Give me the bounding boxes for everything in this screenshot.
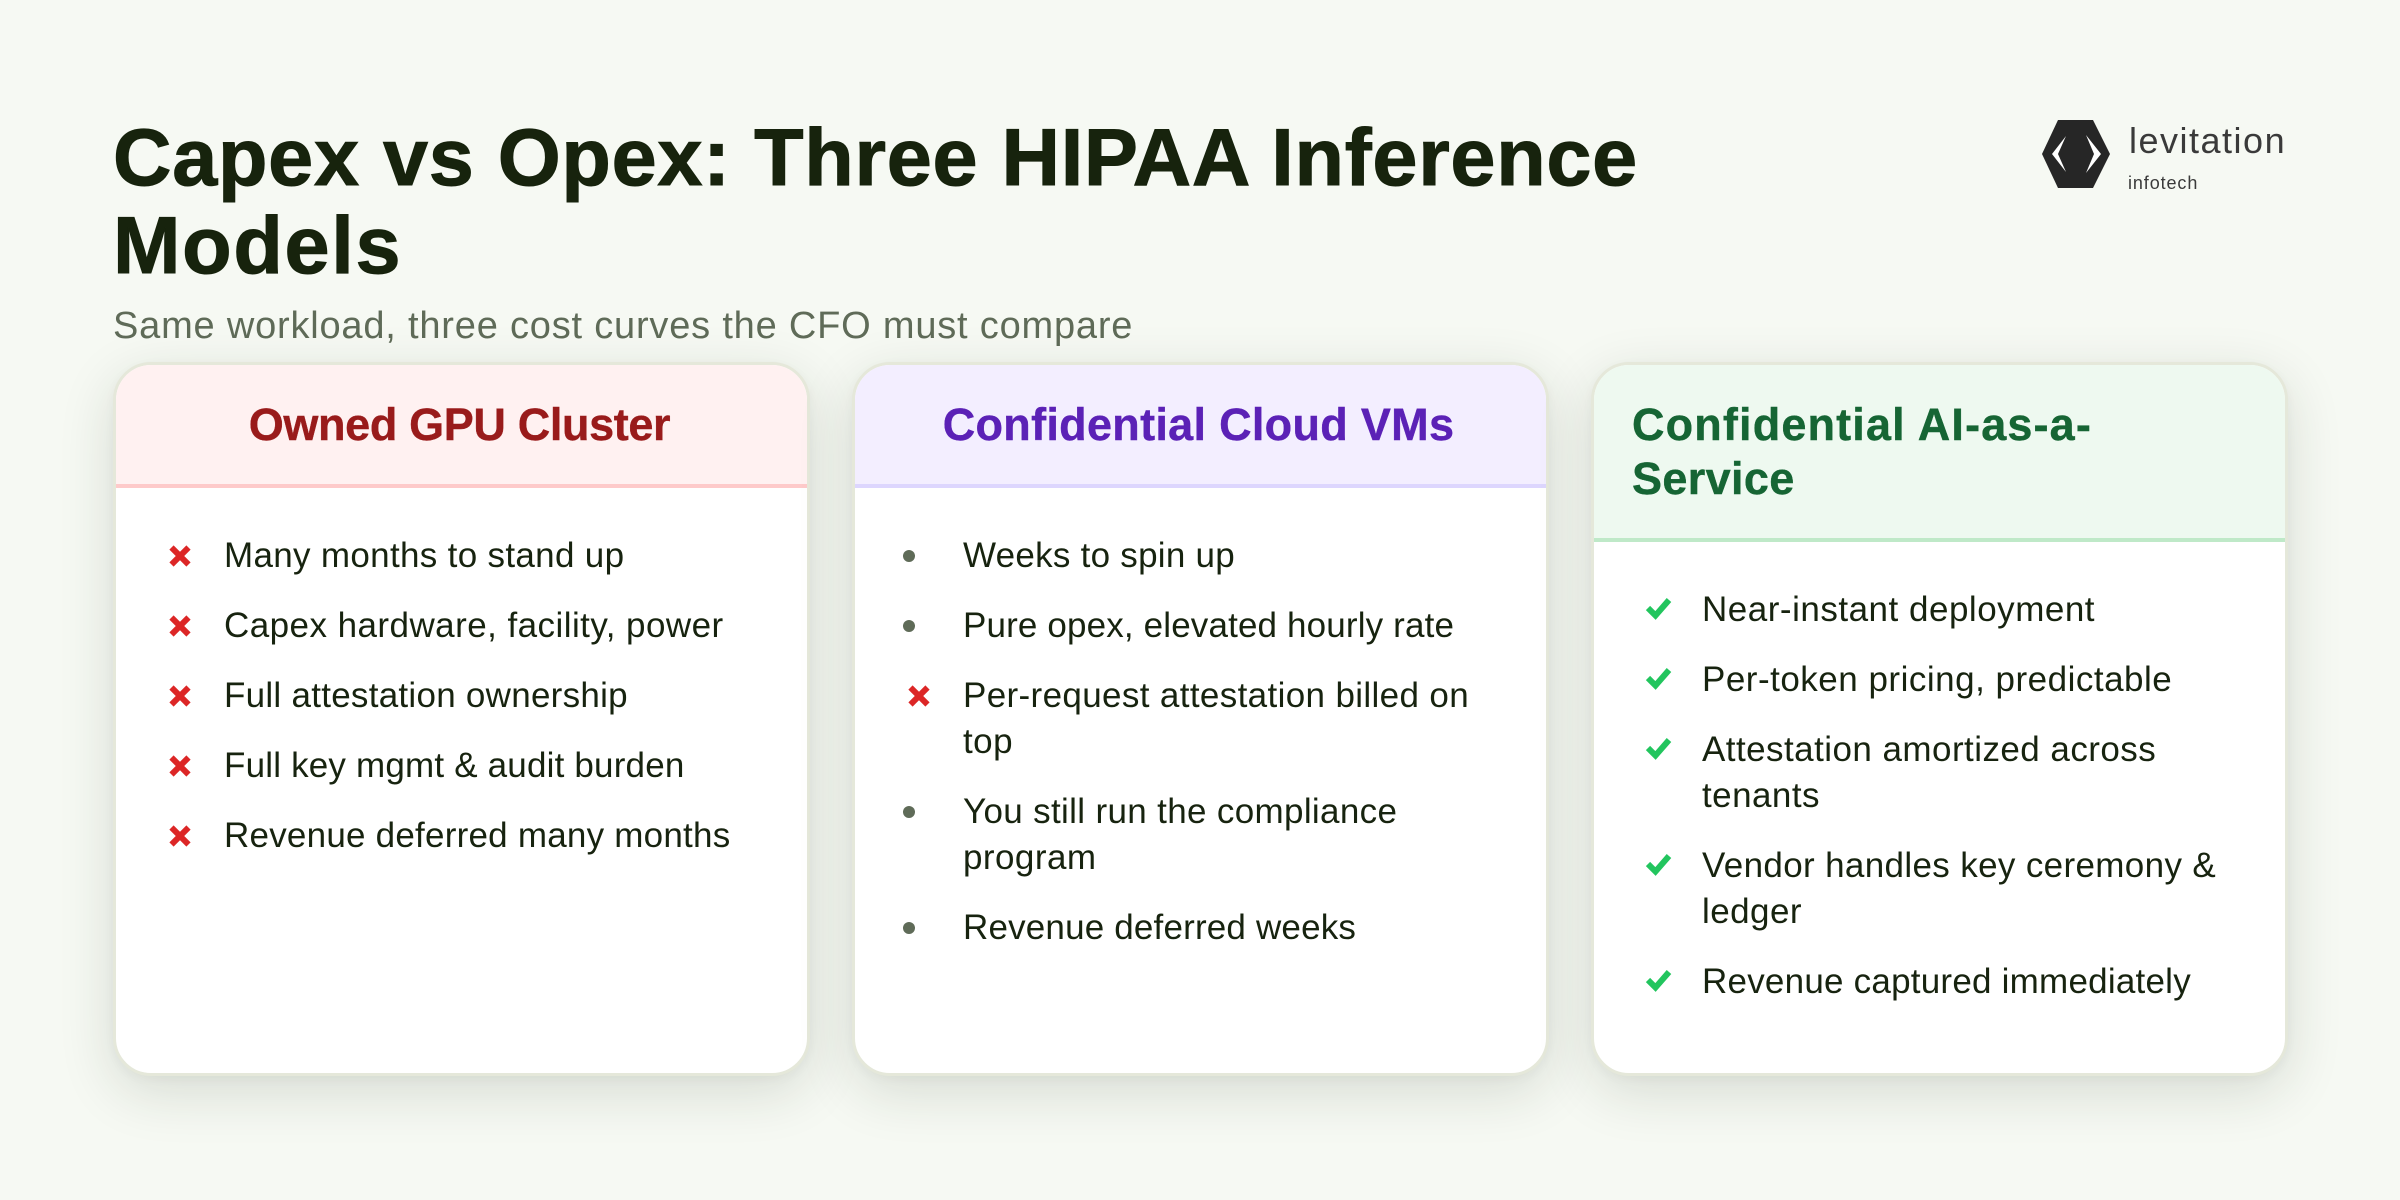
- item: per-token pricing: Per-token pricing, predictable: [1702, 660, 2172, 699]
- title: [113, 113, 1638, 291]
- heading: confidential AI-as-a-service: Service: [1632, 453, 1795, 504]
- item: attestation amortized: tenants: [1702, 776, 1820, 815]
- item: attestation ownership: Full attestation ownership: [224, 676, 628, 715]
- item: attestation amortized: [1646, 730, 2156, 815]
- item: vendor key ceremony: ledger: [1702, 892, 1802, 931]
- logo: levitation infotech: levitation: [2129, 120, 2286, 161]
- item: compliance program: [903, 792, 1397, 877]
- item: near-instant deployment: Near-instant deployment: [1702, 590, 2095, 629]
- heading: owned GPU cluster: [116, 365, 807, 488]
- logo: levitation infotech: [2042, 120, 2286, 193]
- item: compliance program: program: [963, 838, 1096, 877]
- item: per-request attestation: Per-request attestation billed on: [963, 676, 1469, 715]
- panel: confidential AI-as-a-service: [1591, 362, 2288, 1076]
- item: revenue deferred months: Revenue deferred many months: [224, 816, 730, 855]
- heading: confidential AI-as-a-service: [1594, 365, 2285, 542]
- logo: levitation infotech: infotech: [2128, 173, 2198, 193]
- title: Models: [113, 201, 402, 291]
- title: Capex vs Opex: Three HIPAA Inference: [113, 113, 1638, 203]
- item: attestation amortized: Attestation amortized across: [1702, 730, 2156, 769]
- item: vendor key ceremony: Vendor handles key ceremony &: [1702, 846, 2216, 885]
- list: owned GPU cluster drawbacks: [169, 536, 730, 855]
- subtitle: Same workload, three cost curves the CFO must compare: [113, 305, 1133, 347]
- item: revenue deferred weeks: Revenue deferred weeks: [963, 908, 1356, 947]
- item: per-request attestation: [908, 676, 1469, 761]
- item: many months: Many months to stand up: [224, 536, 624, 575]
- item: pure opex: Pure opex, elevated hourly rate: [963, 606, 1454, 645]
- list: confidential cloud VM tradeoffs: [903, 536, 1469, 947]
- list: confidential AI-as-a-service benefits: [1646, 590, 2216, 1001]
- item: weeks to spin up: Weeks to spin up: [963, 536, 1235, 575]
- item: capex hardware: Capex hardware, facility, power: [224, 606, 724, 645]
- heading: confidential cloud VMs: [855, 365, 1546, 488]
- heading: owned GPU cluster: Owned GPU Cluster: [249, 399, 670, 450]
- heading: confidential cloud VMs: Confidential Cloud VMs: [943, 399, 1454, 450]
- item: key management: Full key mgmt & audit burden: [224, 746, 685, 785]
- item: vendor key ceremony: [1646, 846, 2216, 931]
- heading: confidential AI-as-a-service: Confidential AI-as-a-: [1632, 399, 2092, 450]
- panel: owned GPU cluster: [113, 362, 810, 1076]
- item: per-request attestation: top: [963, 722, 1013, 761]
- item: compliance program: You still run the compliance: [963, 792, 1397, 831]
- item: revenue captured: Revenue captured immediately: [1702, 962, 2191, 1001]
- panel: confidential cloud VMs: [852, 362, 1549, 1076]
